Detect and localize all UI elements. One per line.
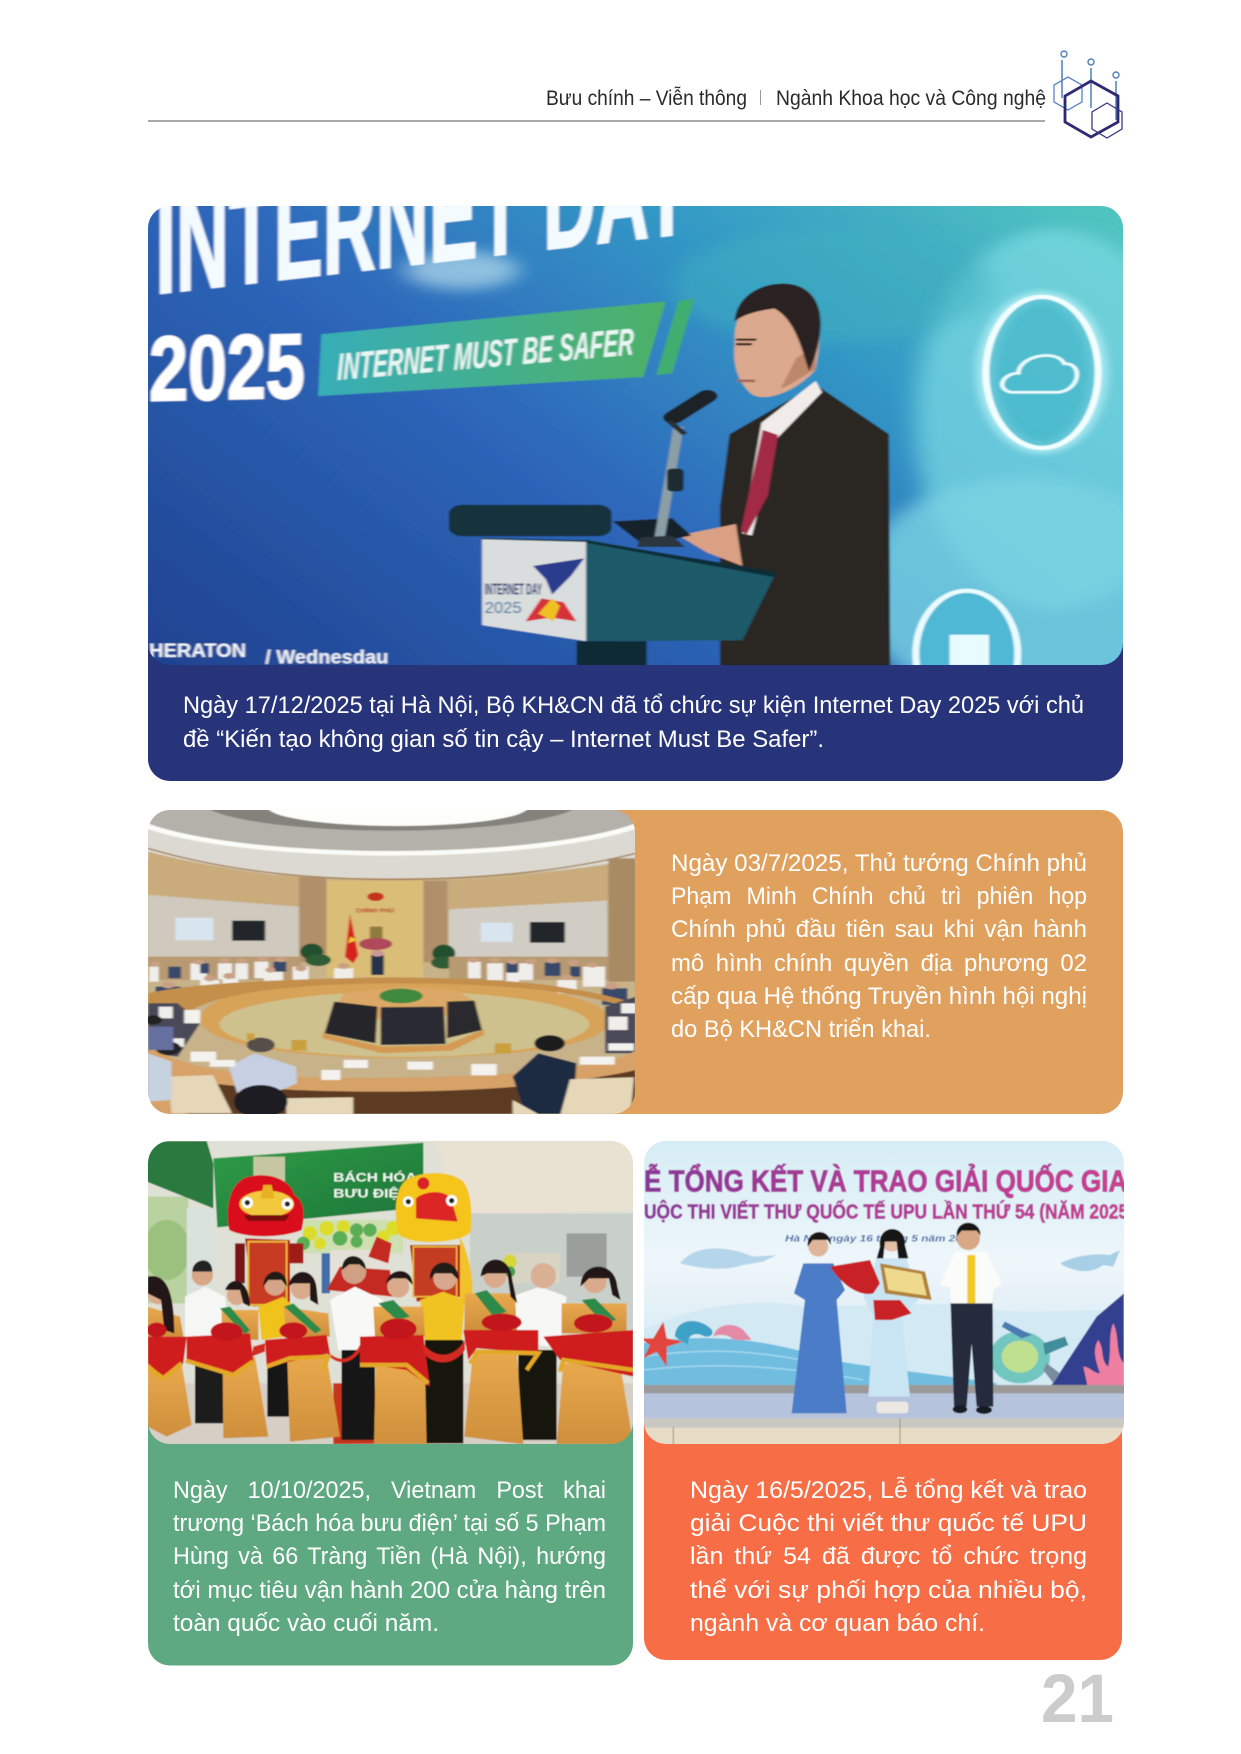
caption text: cấp qua Hệ thống Truyền hình hội nghị xyxy=(671,983,1087,1010)
header section title: Bưu chính – Viễn thông xyxy=(546,87,747,110)
caption background orange red xyxy=(644,1400,1122,1660)
photo: Internet Day speaker: 2025 xyxy=(485,598,522,617)
photo: ribbon cutting xyxy=(143,1140,635,1447)
panel: Vietnam Post store opening xyxy=(143,1140,635,1666)
photo: cabinet meeting room xyxy=(148,810,635,1114)
caption text: do Bộ KH&CN triển khai. xyxy=(671,1016,931,1043)
women in gold dresses xyxy=(148,1293,633,1444)
caption text: Ngày 10/10/2025, Vietnam Post khai xyxy=(173,1477,606,1504)
photo: Internet Day speaker: / Wednesdau xyxy=(265,645,388,668)
photo: Internet Day speaker: HERATON xyxy=(149,640,246,662)
caption text: toàn quốc vào cuối năm. xyxy=(173,1610,439,1637)
caption background green xyxy=(148,1400,633,1666)
photo: ribbon cutting: BƯU ĐIỆN xyxy=(333,1186,410,1201)
photo: UPU award ceremony: Ễ TỔNG KẾT VÀ TRAO GIẢI QUỐC GIA xyxy=(644,1163,1127,1199)
panel: Government meeting xyxy=(148,810,1123,1114)
photo: UPU award ceremony: UỘC THI VIẾT THƯ QUỐC TẾ UPU LẦN THỨ 54 (NĂM 2025) xyxy=(644,1199,1134,1223)
photo: Internet Day speaker: 2025 xyxy=(149,315,305,420)
panel: Internet Day xyxy=(148,206,1123,781)
photo: Internet Day speaker xyxy=(148,206,1123,665)
photo: ribbon cutting: BÁCH HÓA xyxy=(333,1170,417,1185)
caption text: tới mục tiêu vận hành 200 cửa hàng trên xyxy=(173,1577,606,1604)
bouquet and certificate xyxy=(830,1260,880,1294)
woman in blue ao dai xyxy=(792,1263,847,1413)
header separator xyxy=(760,90,761,105)
caption text: Ngày 17/12/2025 tại Hà Nội, Bộ KH&CN đã tổ chức sự kiện Internet Day 2025 với chủ xyxy=(183,692,1084,719)
caption text: giải Cuộc thi viết thư quốc tế UPU xyxy=(690,1510,1087,1537)
header rule xyxy=(148,120,1045,122)
caption text: lần thứ 54 đã được tổ chức trọng xyxy=(690,1543,1087,1570)
panel: UPU letter writing contest xyxy=(640,1140,1134,1660)
man in white shirt xyxy=(940,1252,1002,1305)
header chapter title: Ngành Khoa học và Công nghệ xyxy=(776,87,1046,110)
ribbon tables xyxy=(148,1330,633,1387)
icon: hexagons with pins xyxy=(1054,51,1122,138)
caption text: Ngày 03/7/2025, Thủ tướng Chính phủ xyxy=(671,850,1087,877)
caption text: mô hình chính quyền địa phương 02 xyxy=(671,950,1087,977)
caption text: đề “Kiến tạo không gian số tin cậy – Internet Must Be Safer”. xyxy=(183,726,824,753)
photo: UPU award ceremony xyxy=(640,1140,1134,1445)
caption text: Phạm Minh Chính chủ trì phiên họp xyxy=(671,883,1087,910)
caption text xyxy=(671,850,1087,1043)
caption text xyxy=(173,1477,606,1637)
caption text xyxy=(690,1477,1087,1637)
page number: 21 xyxy=(1041,1660,1114,1737)
caption text: ngành và cơ quan báo chí. xyxy=(690,1610,985,1637)
caption background orange xyxy=(560,810,1123,1114)
caption text: thể với sự phối hợp của nhiều bộ, xyxy=(690,1577,1087,1604)
photo: Internet Day speaker: INTERNET MUST BE SAFER xyxy=(337,321,634,389)
header xyxy=(148,87,1046,122)
caption background navy xyxy=(148,560,1123,781)
men and yellow-shirt women xyxy=(184,1286,226,1338)
caption text: Ngày 16/5/2025, Lễ tổng kết và trao xyxy=(690,1477,1087,1504)
photo: UPU award ceremony: Hà Nội, ngày 16 tháng 5 năm 2025 xyxy=(785,1234,976,1244)
photo: Internet Day speaker: INTERNET DAY xyxy=(485,580,542,598)
caption text: Chính phủ đầu tiên sau khi vận hành xyxy=(671,916,1087,943)
girl in light blue ao dai xyxy=(863,1258,918,1397)
caption text xyxy=(183,692,1084,753)
photo: cabinet meeting room: CHÍNH PHỦ xyxy=(356,907,394,914)
caption text: trương ‘Bách hóa bưu điện’ tại số 5 Phạm xyxy=(173,1510,606,1537)
caption text: Hùng và 66 Tràng Tiền (Hà Nội), hướng xyxy=(173,1543,606,1570)
